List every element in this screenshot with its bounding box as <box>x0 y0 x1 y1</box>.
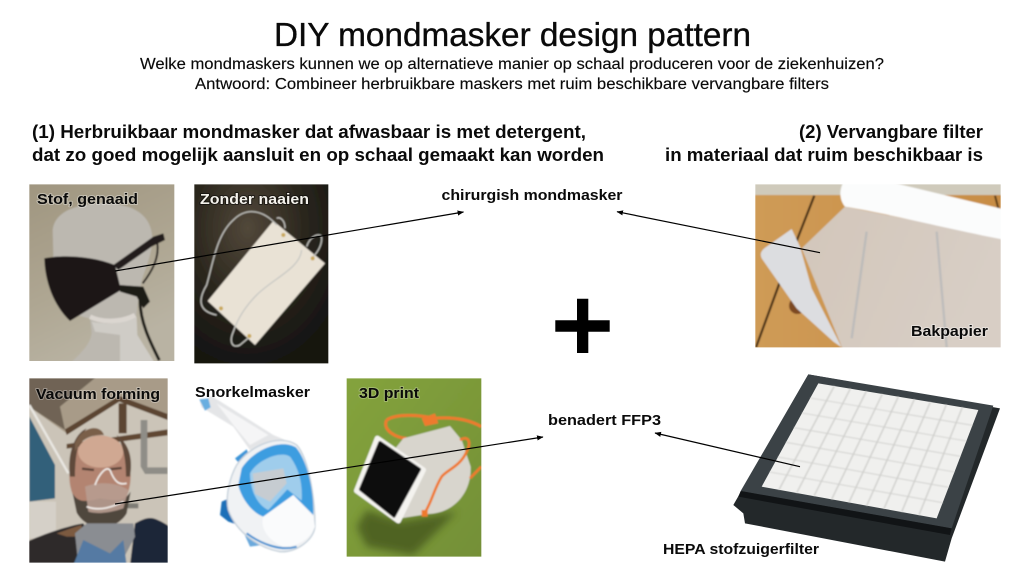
heading: replaceable filter: in materiaal dat ruim beschikbaar is <box>665 145 983 165</box>
label: benadert FFP3: benadert FFP3 <box>548 412 661 429</box>
arrow: rigid masks to FFP3 label <box>115 437 543 504</box>
label: Stof, genaaid: Stof, genaaid <box>37 191 138 208</box>
photo: HEPA filter <box>733 374 1000 562</box>
arrow: fabric mask to surgical mask label <box>115 212 464 271</box>
heading: replaceable filter <box>665 122 983 165</box>
label: 3D print: 3D print <box>359 385 419 402</box>
label: Snorkelmasker: Snorkelmasker <box>195 384 310 401</box>
subtitle answer: Antwoord: Combineer herbruikbare maskers met ruim beschikbare vervangbare filters <box>195 76 829 93</box>
label: Vacuum forming: Vacuum forming <box>36 386 160 403</box>
photo: vacuum forming <box>27 377 170 565</box>
plus sign <box>555 299 610 353</box>
photo: 3D printed mask <box>343 375 485 560</box>
arrow: baking paper to surgical mask label <box>617 212 820 253</box>
label: Bakpapier: Bakpapier <box>911 323 988 340</box>
heading: reusable mask: dat zo goed mogelijk aansluit en op schaal gemaakt kan worden <box>32 145 604 165</box>
label: Zonder naaien: Zonder naaien <box>200 191 309 208</box>
photo: snorkel mask <box>199 396 315 552</box>
arrow: HEPA filter to FFP3 label <box>655 433 800 467</box>
heading: replaceable filter: (2) Vervangbare filter <box>799 122 983 142</box>
label: chirurgish mondmasker: chirurgish mondmasker <box>442 187 623 204</box>
photo: sewn fabric mask <box>27 182 177 363</box>
heading: reusable mask: (1) Herbruikbaar mondmasker dat afwasbaar is met detergent, <box>32 122 586 142</box>
subtitle question: Welke mondmaskers kunnen we op alternatieve manier op schaal produceren voor de ziekenhuizen? <box>140 56 884 73</box>
heading: reusable mask <box>32 122 604 165</box>
filter pleats <box>770 386 972 515</box>
title: DIY mondmasker design pattern <box>274 16 751 53</box>
photo: baking paper <box>752 181 1004 351</box>
label: HEPA stofzuigerfilter: HEPA stofzuigerfilter <box>663 541 819 558</box>
photo: no-sew mask <box>192 182 332 367</box>
